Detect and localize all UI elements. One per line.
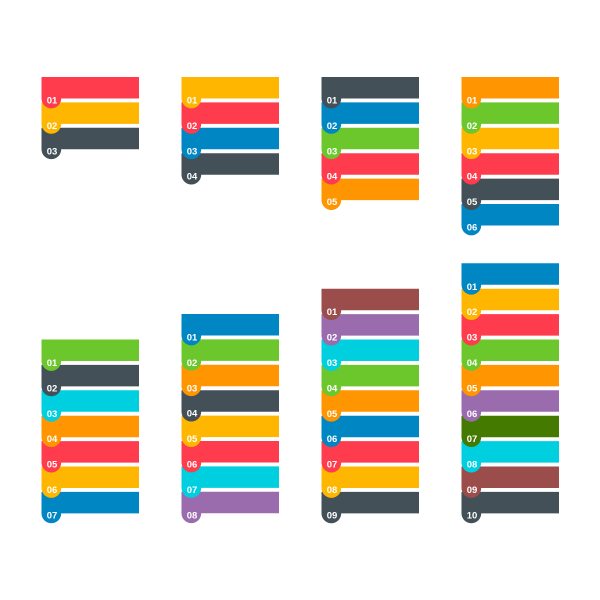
item 08	[182, 492, 279, 523]
item 06	[462, 390, 559, 422]
item 01: 01	[467, 96, 478, 106]
item 04	[462, 153, 559, 185]
item 04	[182, 390, 279, 422]
item 02: 02	[47, 383, 57, 394]
item 06	[462, 204, 559, 235]
item 06: 06	[47, 485, 57, 496]
item 02: 02	[327, 121, 337, 132]
item 03	[42, 390, 139, 422]
item 05	[462, 179, 559, 210]
item 02	[462, 102, 559, 134]
item 08	[462, 441, 559, 472]
item 04	[462, 340, 559, 371]
item 05	[42, 441, 139, 472]
item 03: 03	[327, 146, 337, 157]
item 03: 03	[187, 383, 197, 394]
item 02: 02	[467, 307, 477, 318]
item 01	[182, 314, 279, 345]
item 02	[462, 289, 559, 320]
item 05: 05	[467, 197, 478, 208]
item 01: 01	[47, 358, 58, 369]
item 03: 03	[47, 409, 57, 420]
item 05: 05	[467, 383, 478, 394]
panel: list of 10 items	[462, 263, 559, 523]
item 01: 01	[327, 96, 338, 106]
item 04: 04	[467, 172, 478, 183]
item 09	[462, 466, 559, 498]
item 07	[182, 466, 279, 498]
item 02: 02	[47, 121, 57, 132]
panel: list of 6 items	[462, 77, 559, 235]
item 01	[462, 263, 559, 295]
item 07	[322, 441, 419, 472]
panel: list of 3 items	[42, 77, 139, 159]
item 05	[182, 416, 279, 447]
item 03	[462, 314, 559, 345]
item 03: 03	[467, 333, 477, 344]
item 08: 08	[187, 510, 197, 521]
item 04: 04	[327, 172, 338, 183]
item 06: 06	[327, 434, 337, 445]
item 09: 09	[327, 510, 337, 521]
item 05: 05	[327, 409, 338, 420]
item 07: 07	[47, 510, 57, 521]
panel: list of 9 items	[322, 289, 419, 523]
item 02	[322, 314, 419, 345]
item 03: 03	[187, 146, 197, 157]
item 07: 07	[467, 434, 477, 445]
item 05: 05	[187, 434, 198, 445]
item 07: 07	[327, 460, 337, 471]
item 05: 05	[47, 460, 58, 471]
item 06	[182, 441, 279, 472]
item 07	[42, 492, 139, 523]
item 10	[462, 492, 559, 523]
item 04	[322, 365, 419, 396]
item 01: 01	[47, 96, 58, 106]
item 06: 06	[187, 460, 197, 470]
item 03	[182, 365, 279, 396]
item 06	[322, 416, 419, 447]
item 02: 02	[467, 121, 477, 132]
panel: list of 7 items	[42, 340, 139, 523]
panel: list of 4 items	[182, 77, 279, 185]
item 04: 04	[187, 172, 198, 183]
item 04	[42, 416, 139, 447]
item 02	[182, 339, 279, 371]
item 04: 04	[47, 434, 58, 445]
panel: list of 5 items	[322, 77, 419, 210]
item 02: 02	[187, 121, 197, 132]
item 02: 02	[187, 358, 197, 369]
item 03: 03	[327, 358, 337, 369]
item 09	[322, 492, 419, 523]
item 04: 04	[187, 409, 198, 420]
item 01	[462, 77, 559, 108]
item 01	[42, 340, 139, 371]
item 02: 02	[327, 333, 337, 344]
item 05	[322, 390, 419, 422]
item 04: 04	[467, 358, 478, 369]
item 05	[462, 365, 559, 396]
item 03: 03	[467, 146, 477, 157]
item 03: 03	[47, 146, 57, 157]
item 02	[42, 365, 139, 396]
item 08: 08	[467, 460, 477, 471]
item 07	[462, 416, 559, 447]
item 08	[322, 466, 419, 498]
item 01: 01	[327, 307, 338, 318]
item 06: 06	[467, 222, 477, 234]
item 03	[462, 128, 559, 159]
item 03	[322, 340, 419, 371]
item 05: 05	[327, 197, 338, 208]
item 06	[42, 466, 139, 498]
item 01: 01	[467, 282, 478, 293]
item 10: 10	[467, 510, 477, 521]
item 01: 01	[187, 332, 198, 344]
panel: list of 8 items	[182, 314, 279, 523]
item 09: 09	[467, 485, 477, 496]
item 01: 01	[187, 96, 198, 106]
item 04: 04	[327, 383, 338, 394]
item 01	[322, 289, 419, 320]
item 07: 07	[187, 485, 197, 496]
item 08: 08	[327, 485, 337, 496]
item 06: 06	[467, 409, 477, 420]
